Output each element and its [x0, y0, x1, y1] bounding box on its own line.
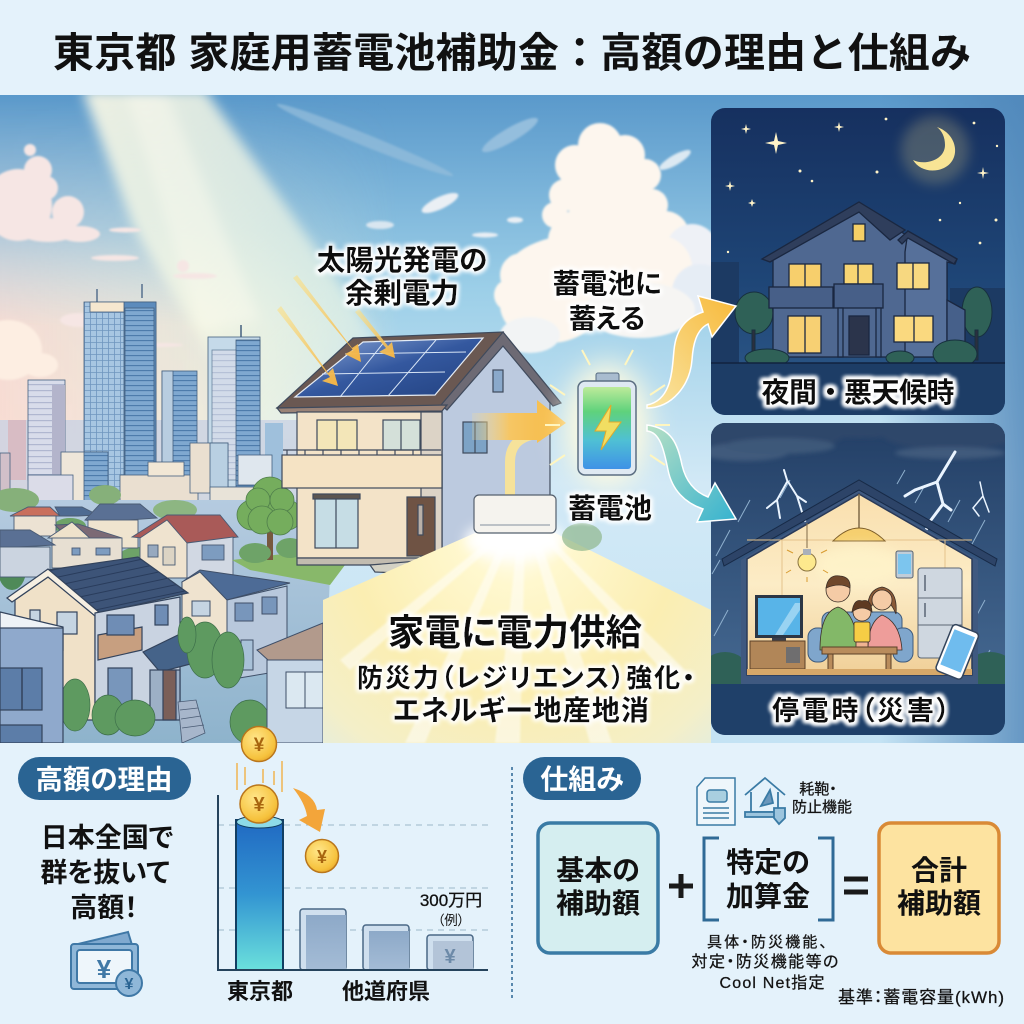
- box: basic subsidy: 基本の: [556, 855, 640, 886]
- heading pill: reason: 高額の理由: [35, 764, 173, 795]
- house cutaway: [722, 480, 997, 684]
- motion lines: [237, 761, 282, 792]
- label: store in battery: 蓄電池に: [552, 268, 662, 299]
- box: basic subsidy: [538, 823, 658, 953]
- plus sign: [669, 874, 693, 898]
- label: outage: 停電時（災害）: [772, 696, 950, 726]
- tablet: [896, 551, 913, 578]
- family: [820, 576, 902, 650]
- title: 東京都 家庭用蓄電池補助金：高額の理由と仕組み: [53, 30, 971, 76]
- label: battery: 蓄電池: [568, 493, 652, 524]
- sofa: [808, 612, 913, 662]
- rain: [712, 470, 990, 668]
- curved arrow to night panel: [647, 296, 736, 408]
- label: store: 蓄える: [569, 303, 645, 334]
- tv stand: [750, 638, 805, 669]
- box: added amount: [704, 838, 833, 920]
- AC feed arrow: [510, 434, 536, 495]
- hero labels: [317, 245, 695, 726]
- note: added amount detail: [692, 934, 838, 992]
- axis label: Tokyo: 東京都: [227, 979, 293, 1004]
- coin: on bar: [240, 785, 278, 823]
- curved arrow to blackout panel: [647, 425, 736, 522]
- trees: [735, 287, 992, 360]
- label: supply appliances: 家電に電力供給: [388, 612, 643, 653]
- bar: prefecture 1: [300, 909, 346, 970]
- scene: hero illustration: [0, 90, 1024, 744]
- note: added amount detail: Cool Net指定: [720, 974, 824, 992]
- shrubs in front: [60, 617, 270, 744]
- moon and stars: [725, 116, 998, 253]
- icon: banknote and coin: ¥: [97, 954, 112, 984]
- air conditioner: [474, 495, 556, 533]
- label: night: 夜間・悪天候時: [762, 377, 954, 408]
- box: total: 補助額: [897, 888, 981, 919]
- headline text: 日本全国で: [41, 823, 174, 853]
- neighbouring house right: [182, 570, 290, 680]
- axis label: other prefectures: 他道府県: [342, 979, 430, 1004]
- small text: functions: 耗鞄・: [799, 781, 837, 798]
- city skyline: [0, 284, 296, 500]
- lightning bolt: [595, 405, 621, 450]
- clouds: [0, 99, 728, 380]
- box: total: 合計: [911, 855, 967, 886]
- coffee table: [822, 647, 897, 673]
- night house: [762, 202, 965, 357]
- label: solar surplus: 太陽光発電の: [317, 245, 487, 277]
- shrubs: [744, 340, 978, 362]
- smartphone: [935, 623, 980, 680]
- section: mechanism: [523, 757, 1004, 1007]
- coin: bouncing: ¥: [317, 847, 327, 867]
- foreground blue building: [0, 612, 63, 743]
- bar: prefecture 2: [363, 925, 409, 970]
- section: reason for high amount: [18, 726, 488, 1004]
- equals sign: [844, 879, 868, 892]
- yellow glow fan: [323, 520, 711, 743]
- panel: night and bad weather: [711, 108, 1005, 415]
- note: added amount detail: 具体・防災機能、: [707, 934, 827, 951]
- arrow to battery: [472, 400, 566, 443]
- dashed divider: [511, 767, 513, 998]
- lightning bolts: [767, 452, 989, 530]
- shrub right of AC: [562, 523, 602, 551]
- panel: power outage: [690, 404, 1020, 735]
- coin: top: ¥: [254, 735, 265, 756]
- battery: [545, 350, 670, 487]
- icon: house with shield: [745, 778, 785, 824]
- sunlight arrows: [277, 275, 395, 386]
- label: local energy: エネルギー地産地消: [393, 695, 649, 726]
- television: [755, 595, 803, 638]
- label: surplus power: 余剰電力: [345, 278, 459, 310]
- ground band: [711, 363, 1005, 415]
- coin: bouncing: [306, 840, 338, 872]
- bar: prefecture 3: ¥: [444, 946, 456, 968]
- label: resilience: 防災力（レジリエンス）強化・: [357, 663, 695, 693]
- neighbourhood ground: [0, 500, 330, 743]
- note: basis: 基準：蓄電容量(kWh): [838, 988, 1004, 1007]
- heading pill: mechanism: [523, 757, 641, 800]
- foreground steps: [178, 700, 205, 743]
- arrow: coin falling: [293, 788, 325, 832]
- box: added amount: 加算金: [726, 881, 810, 912]
- axes: [218, 795, 488, 970]
- distant houses: [0, 504, 238, 578]
- sky: [0, 90, 1024, 743]
- value label: 300万円: [420, 891, 482, 910]
- bottom band: [0, 743, 1024, 1024]
- note: added amount detail: 対定・防災機能等の: [692, 953, 838, 971]
- ceiling lamp: [814, 494, 904, 585]
- refrigerator: [918, 568, 962, 658]
- distant buildings: [711, 262, 1005, 372]
- headline text: [40, 823, 174, 923]
- icon: banknote and coin: ¥: [125, 976, 134, 993]
- large blue roof house: [7, 557, 198, 720]
- box: added amount: 特定の: [726, 847, 810, 878]
- foreground house right: [257, 623, 323, 743]
- ground band: [711, 684, 1005, 735]
- value note: （例）: [438, 913, 464, 928]
- small text: functions: [792, 781, 852, 816]
- shrubs: [701, 652, 1016, 692]
- small text: functions: 防止機能: [792, 799, 852, 816]
- box: basic subsidy: 補助額: [556, 888, 640, 919]
- bar: Tokyo: [236, 816, 283, 970]
- heading pill: reason: [18, 757, 191, 800]
- tree next to main house: [232, 477, 345, 585]
- hanging bulb: [786, 523, 828, 582]
- headline text: 高額！: [70, 893, 138, 923]
- headline text: 群を抜いて: [40, 858, 170, 888]
- heading pill: mechanism: 仕組み: [540, 764, 624, 795]
- floor: [747, 669, 972, 675]
- box: total: [879, 823, 999, 953]
- bar: prefecture 3: [427, 935, 473, 970]
- coin: top: [242, 726, 276, 762]
- icon: banknote and coin: [71, 932, 142, 996]
- main house: [277, 332, 561, 575]
- icon: document: [697, 778, 735, 825]
- coin: on bar: ¥: [253, 794, 265, 816]
- storm clouds: [690, 404, 1020, 461]
- bar chart: [218, 795, 488, 1004]
- trees and shrubs behind houses: [0, 485, 197, 590]
